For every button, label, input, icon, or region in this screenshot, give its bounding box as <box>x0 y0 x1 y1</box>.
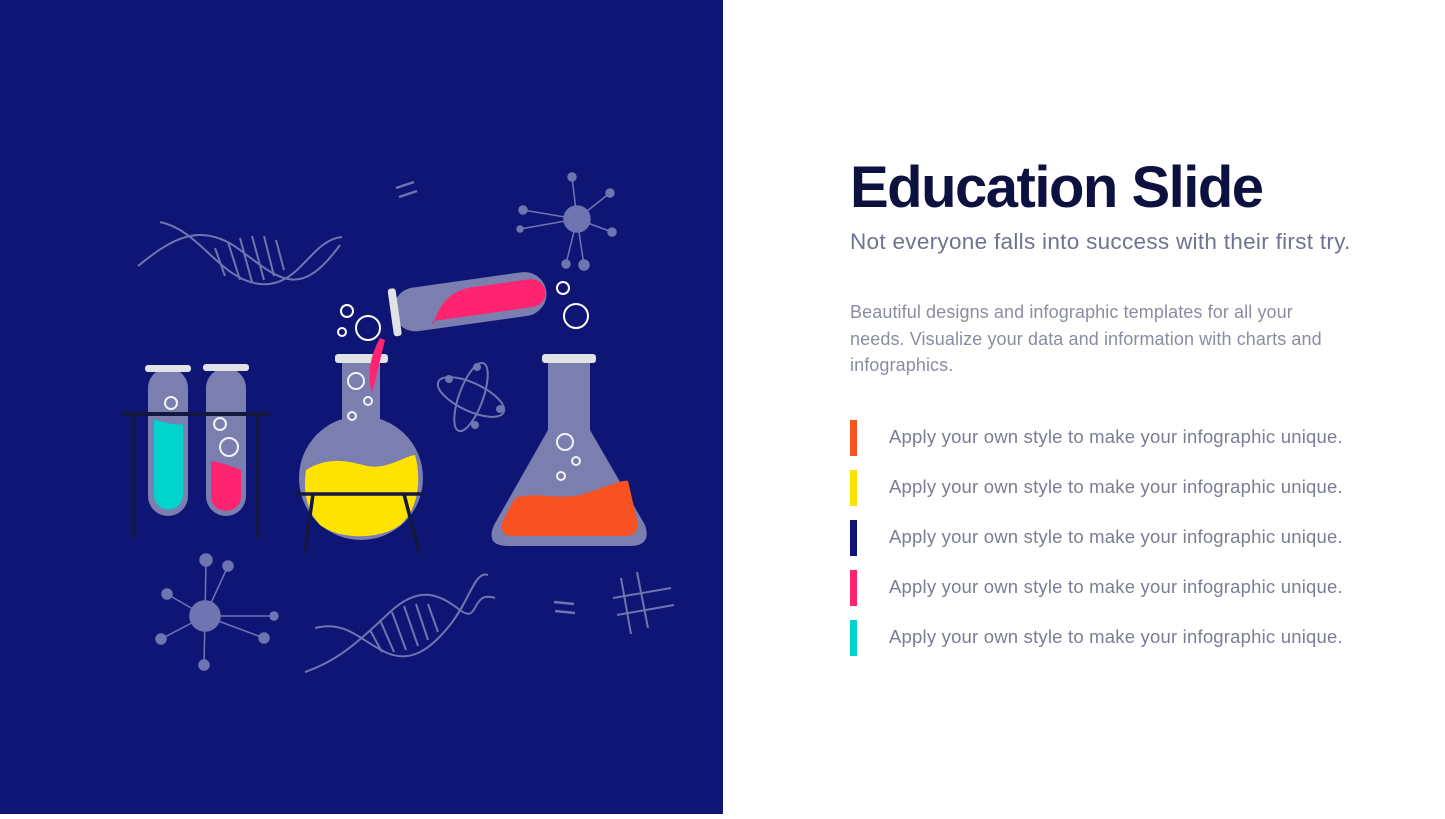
panel: illustration <box>0 0 723 814</box>
icon: erlenmeyer flask <box>491 354 647 546</box>
icon: dna bottom <box>305 574 495 672</box>
bullet: pink <box>850 570 1343 606</box>
icon: hash <box>613 572 674 634</box>
bullet: orange: Apply your own style to make your infographic unique. <box>889 426 1343 447</box>
icon: test tubes in rack <box>121 364 270 537</box>
bullet: navy <box>850 520 1343 556</box>
icon: equals top <box>396 182 417 197</box>
bullet: orange <box>850 420 1343 456</box>
subtitle: Not everyone falls into success with their first try. <box>850 229 1351 254</box>
icon: molecule bottom <box>156 554 278 670</box>
bullet: yellow: Apply your own style to make your infographic unique. <box>889 476 1343 497</box>
icon: dna top <box>138 222 342 284</box>
bullet list <box>850 420 1343 656</box>
text block: description: Beautiful designs and infographic templates for all your needs. Visualize your data and information with charts and infographics. <box>850 302 1322 375</box>
bullet: cyan <box>850 620 1343 656</box>
bubbles <box>338 282 588 340</box>
bullet: yellow <box>850 470 1343 506</box>
icon: molecule top <box>517 173 616 270</box>
icon: atom <box>432 359 510 435</box>
icon: round flask <box>296 338 423 552</box>
title: Education Slide <box>850 155 1263 220</box>
bullet: cyan: Apply your own style to make your infographic unique. <box>889 626 1343 647</box>
icon: tilted test tube <box>387 267 550 337</box>
icon: equals bottom <box>554 602 575 613</box>
bullet: pink: Apply your own style to make your infographic unique. <box>889 576 1343 597</box>
bullet: navy: Apply your own style to make your infographic unique. <box>889 526 1343 547</box>
